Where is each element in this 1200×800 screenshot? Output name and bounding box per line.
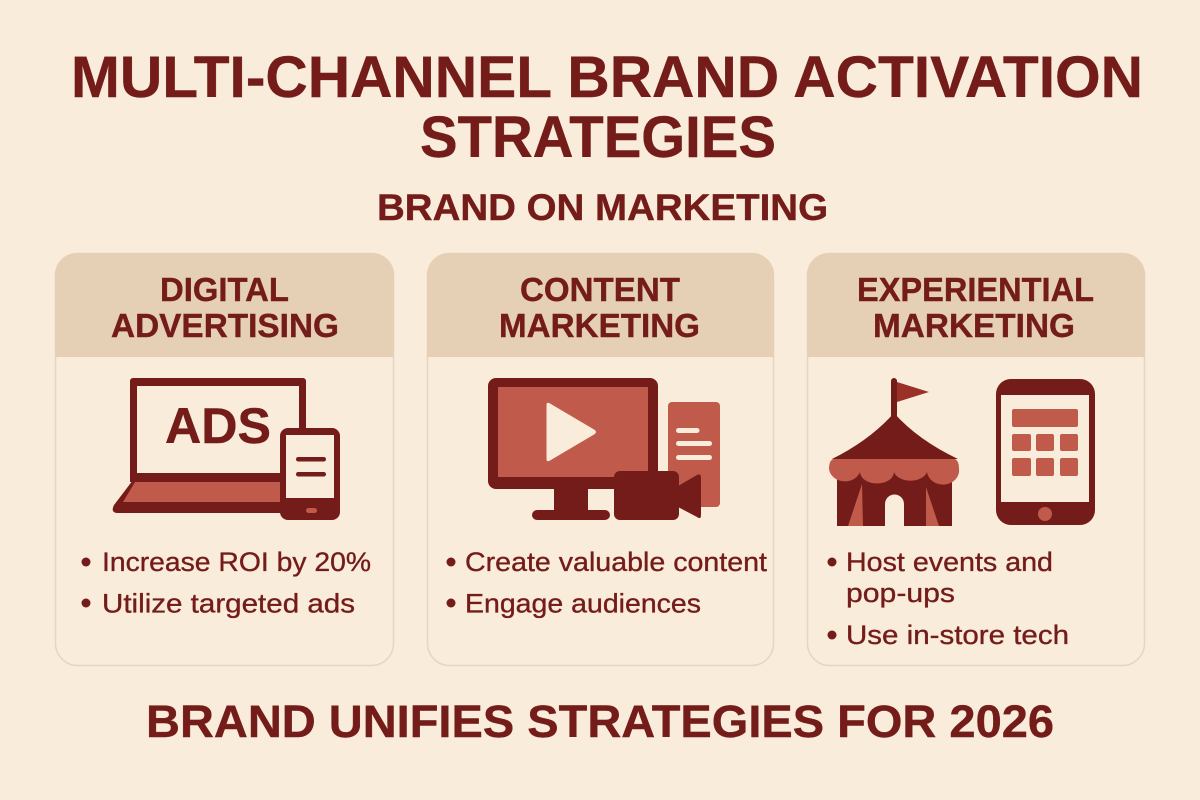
bullet list: digital advertising (82, 547, 371, 618)
panel: content marketing (427, 253, 774, 666)
bullet list: experiential marketing: Use in-store tech (846, 620, 1069, 650)
panel header: digital advertising (55, 253, 394, 357)
panel: digital advertising (55, 253, 394, 666)
closing statement: BRAND UNIFIES STRATEGIES FOR 2026 (146, 696, 1054, 747)
panel header: content marketing: MARKETING (499, 307, 700, 344)
bullet list: experiential marketing: Host events and (846, 547, 1053, 577)
panel header: digital advertising: ADVERTISING (111, 307, 339, 344)
panel header: experiential marketing (807, 253, 1145, 357)
title: MULTI-CHANNEL BRAND ACTIVATION (71, 45, 1143, 110)
bullet list: digital advertising: Utilize targeted ads (102, 588, 355, 618)
panel: experiential marketing (807, 253, 1145, 666)
icon: laptop and phone with ads (113, 378, 340, 520)
panel header: content marketing: CONTENT (520, 271, 680, 308)
icon: event tent (829, 378, 959, 526)
bullet list: experiential marketing (828, 547, 1069, 650)
bullet list: content marketing: Create valuable content (465, 547, 768, 577)
bullet list: experiential marketing: pop-ups (846, 578, 955, 608)
panel header: experiential marketing: EXPERIENTIAL (857, 271, 1094, 308)
panel header: digital advertising: DIGITAL (160, 271, 289, 308)
icon: video monitor, document and camera (488, 378, 720, 520)
title (71, 45, 1143, 170)
icon: tablet with app grid (996, 379, 1095, 525)
bullet list: digital advertising: Increase ROI by 20% (102, 547, 371, 577)
panel header: content marketing (427, 253, 774, 357)
panel header: experiential marketing: MARKETING (873, 307, 1075, 344)
bullet list: content marketing: Engage audiences (465, 588, 701, 618)
icon: laptop and phone with ads: ADS (165, 398, 271, 454)
title: STRATEGIES (420, 105, 776, 170)
subtitle: BRAND ON MARKETING (377, 187, 828, 228)
bullet list: content marketing (446, 547, 768, 618)
